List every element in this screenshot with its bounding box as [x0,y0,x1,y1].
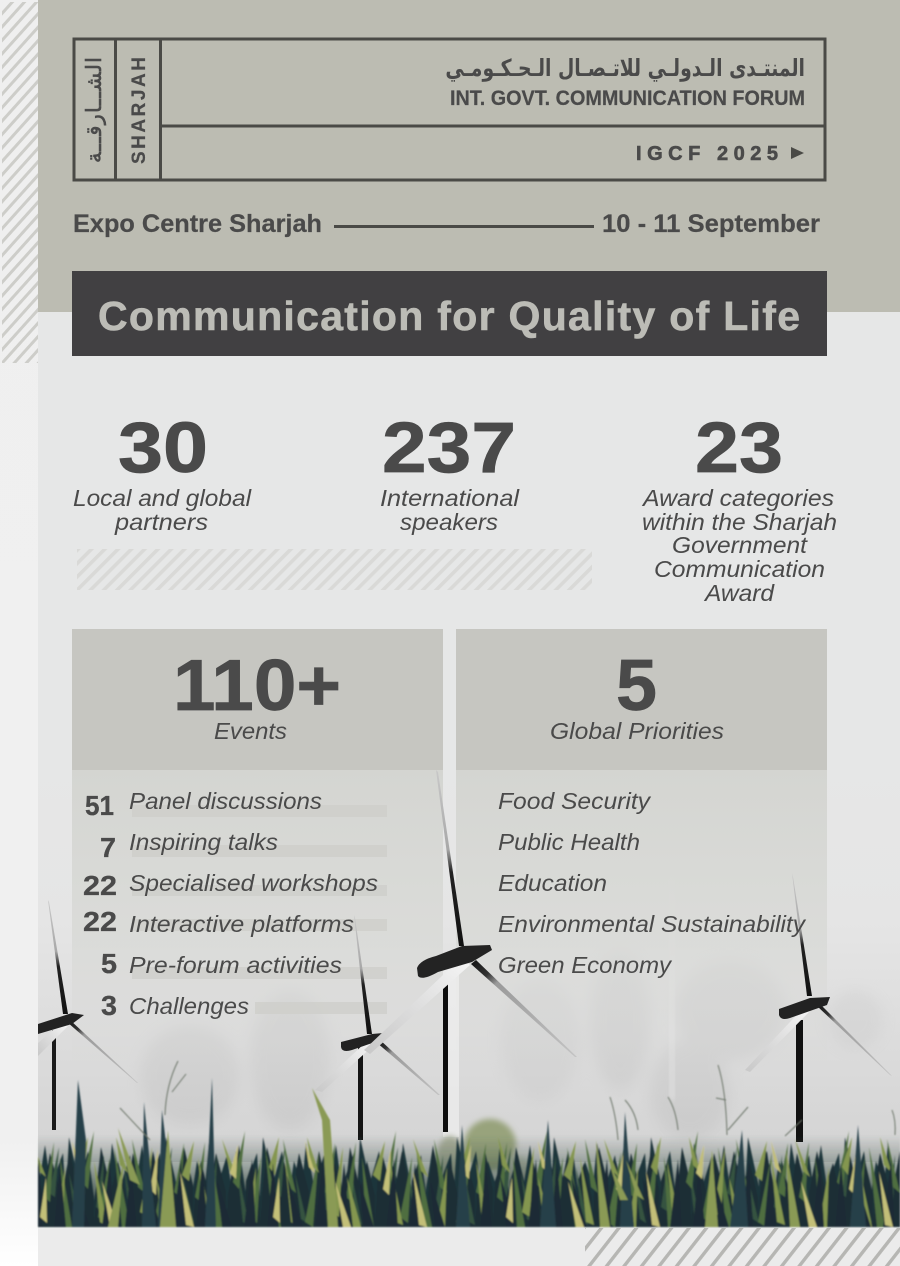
row: panel discussions [85,788,323,821]
stat: award categories: Government [672,532,809,558]
stat: speakers: 237 [382,409,516,488]
turbine: right [745,873,892,1142]
date text: 10 - 11 September [602,210,820,238]
stat: award categories: within the Sharjah [642,509,837,535]
sharjah vertical label: SHARJAH [129,57,150,164]
stat: partners: 30 [118,409,208,488]
stat: award categories: Award [703,580,775,606]
english forum name: INT. GOVT. COMMUNICATION FORUM [450,87,805,110]
highlight bars behind event rows [132,805,387,1014]
turbine: large centre [364,770,577,1137]
title banner: Communication for Quality of Life [98,293,800,339]
grass field [38,1061,900,1227]
turbine: far left [38,900,138,1130]
lower strip background [38,1228,900,1266]
panel: events [72,629,443,1110]
stat: partners: Local and global [73,485,252,511]
priorities list: Education [498,870,607,896]
stat: award categories: Communication [654,556,825,582]
priorities list: Green Economy [498,952,673,978]
stat: partners: partners [114,509,209,535]
stat: award categories: Award categories [641,485,835,511]
title banner [72,271,827,356]
row: inspiring talks: Inspiring talks [129,829,279,855]
priorities list [498,788,807,978]
left margin column [0,0,38,1266]
arabic sharjah vertical label: الشــارقــة [82,57,106,163]
stat: award categories [641,409,837,606]
turbine: small centre [315,915,440,1140]
row: interactive platforms: Interactive platforms [129,911,355,937]
stat: award categories: 23 [695,409,783,488]
connector line [334,225,594,228]
forum edition label: IGCF 2025 [636,143,778,165]
priorities label: Global Priorities [550,718,725,744]
striped strip: bottom right [585,1228,900,1266]
priorities list: Public Health [498,829,640,855]
panel: global priorities [456,629,827,1110]
stat: speakers: speakers [400,509,499,535]
stat: speakers [380,409,520,535]
row: specialised workshops [83,870,379,901]
foggy background scene [38,762,900,1162]
tree behind grass [436,1119,536,1204]
row: interactive platforms: 22 [83,906,117,937]
top header band [38,0,900,312]
priorities count: 5 [616,646,657,726]
priorities list: Environmental Sustainability [498,911,807,937]
row: pre-forum activities: 5 [101,948,117,979]
row: pre-forum activities: Pre-forum activities [129,952,343,978]
striped strip: top left [2,2,38,363]
arabic forum name: المنتـدى الـدولـي للاتـصـال الـحـكـومـي [445,55,805,83]
row: inspiring talks: 7 [100,832,116,863]
events list [83,788,379,1021]
events count: 110+ [173,646,341,726]
stat: speakers: International [380,485,520,511]
events label: Events [214,718,288,744]
row: panel discussions: 51 [85,790,114,821]
venue text: Expo Centre Sharjah [73,210,322,238]
row: specialised workshops: Specialised workshops [129,870,379,896]
row: interactive platforms [83,906,355,937]
frame: forum logo block [74,39,825,180]
stat: partners [73,409,252,535]
row: panel discussions: Panel discussions [129,788,323,814]
priorities list: Food Security [498,788,652,814]
row: inspiring talks [100,829,279,863]
row: challenges: Challenges [129,993,250,1019]
row: specialised workshops: 22 [83,870,117,901]
row: pre-forum activities [101,948,343,979]
row: challenges: 3 [101,990,117,1021]
row: challenges [101,990,250,1021]
icon: play arrow [791,147,804,159]
striped strip: middle [77,549,592,590]
